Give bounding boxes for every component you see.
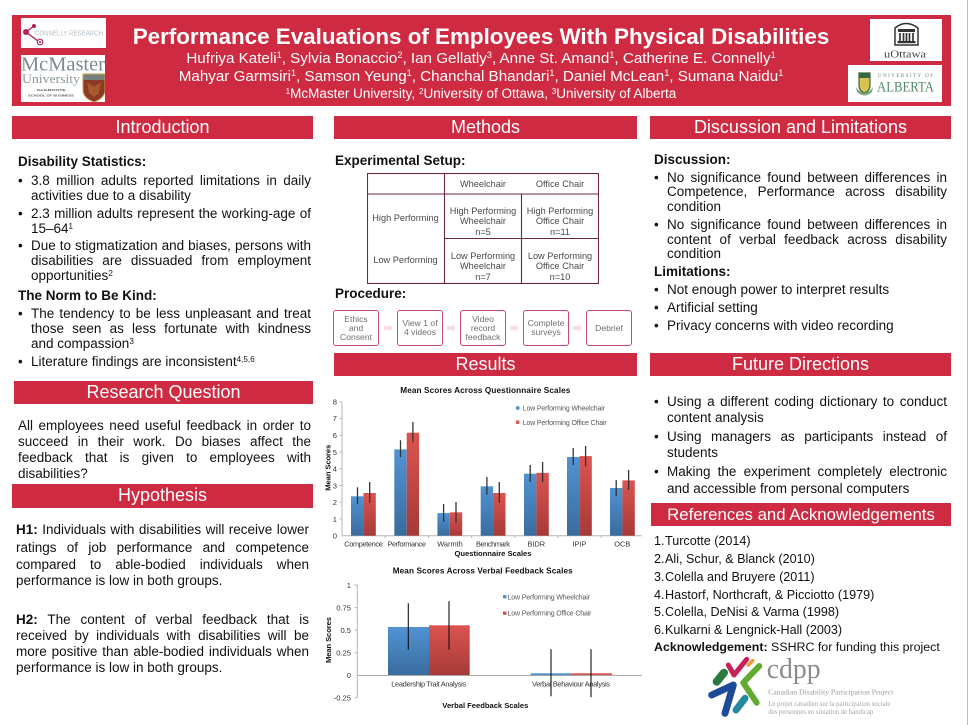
bar chart: questionnaire scales: 7 xyxy=(333,414,337,423)
panel: hypotheses text: H1: Individuals with disabilities will receive lower xyxy=(16,522,309,537)
panel: references list: 6. xyxy=(654,623,665,637)
heading: Results: Results xyxy=(455,354,516,374)
panel: references list: Hastorf, Northcraft, & Picciotto (1979) xyxy=(665,588,874,602)
bar chart: questionnaire scales: BIDR xyxy=(527,540,545,548)
bar chart: questionnaire scales: 0 xyxy=(333,532,337,540)
panel: future directions text: Using managers as participants instead of xyxy=(667,429,947,444)
title: Performance Evaluations of Employees With Physical Disabilities xyxy=(133,24,829,49)
table: experimental setup: Low Performing xyxy=(528,251,592,261)
bar chart: questionnaire scales: Mean Scores Across Questionnaire Scales xyxy=(400,386,571,395)
header banner xyxy=(12,15,951,106)
bar chart: verbal feedback scales: 0.75 xyxy=(336,604,351,612)
legend xyxy=(503,594,592,618)
panel: future directions text: • xyxy=(654,429,659,444)
panel: hypotheses text: compared to able-bodied individuals when xyxy=(16,557,309,572)
panel: introduction text: The Norm to Be Kind: xyxy=(18,288,157,303)
panel: introduction text: activities due to a disability xyxy=(31,188,191,203)
table: experimental setup: High Performing xyxy=(450,206,516,216)
panel: future directions text: Making the experiment completely electronic xyxy=(667,464,947,479)
logo: uOttawa xyxy=(870,19,942,61)
panel: discussion and limitations text xyxy=(654,152,947,333)
bar chart: verbal feedback scales: Verbal Behaviour Analysis xyxy=(532,680,610,688)
table: experimental setup: High Performing xyxy=(527,206,593,216)
heading: Introduction: Introduction xyxy=(115,117,210,137)
heading: Procedure: Procedure: xyxy=(335,286,406,301)
heading: Hypothesis: Hypothesis xyxy=(118,485,207,505)
panel: discussion and limitations text: Limitations: xyxy=(654,264,730,278)
bar chart: questionnaire scales: 2 xyxy=(333,498,337,507)
panel: introduction text: • xyxy=(18,354,23,369)
table: experimental setup: High Performing xyxy=(372,213,439,223)
table: experimental setup: n=5 xyxy=(475,227,491,237)
flow: procedure steps: Consent xyxy=(340,332,372,342)
panel: discussion and limitations text: • xyxy=(654,282,659,296)
panel: future directions text: • xyxy=(654,394,659,409)
bar chart: questionnaire scales: 6 xyxy=(333,431,337,440)
table: experimental setup: Wheelchair xyxy=(460,261,506,271)
panel: introduction text: • xyxy=(18,238,23,253)
panel: discussion and limitations text: condition xyxy=(667,246,721,260)
panel: future directions text xyxy=(654,394,948,496)
panel: introduction text: 3.8 million adults reported limitations in daily xyxy=(31,173,311,188)
bar chart: questionnaire scales: OCB xyxy=(614,540,630,548)
flow: procedure steps: feedback xyxy=(466,332,500,342)
panel: discussion and limitations text: Artificial setting xyxy=(667,300,758,314)
panel: discussion and limitations text: • xyxy=(654,216,659,232)
logo: Canadian Disability Participation Project: des personnes en situation de handicap xyxy=(768,709,874,716)
bar chart: questionnaire scales: Competence xyxy=(344,540,383,548)
panel: references list: 5. xyxy=(654,605,665,619)
bar chart: questionnaire scales: 1 xyxy=(333,515,337,524)
panel: discussion and limitations text: No significance found between differences in xyxy=(667,170,947,184)
legend: Low Performing Wheelchair xyxy=(523,406,606,412)
flow: procedure steps: record xyxy=(471,322,495,332)
panel: future directions text: • xyxy=(654,464,659,479)
panel: hypotheses text: performance is low in both groups. xyxy=(16,660,222,675)
bars xyxy=(388,625,612,675)
table: experimental setup: Low Performing xyxy=(451,251,515,261)
panel: introduction text: disabilities are dissuaded from employment xyxy=(31,253,311,268)
bar chart: verbal feedback scales xyxy=(325,567,642,710)
heading: Research Question xyxy=(14,381,313,404)
table: experimental setup xyxy=(367,173,599,284)
panel: hypotheses text: H2: The content of verbal feedback that is xyxy=(16,612,309,627)
panel: research question text: All employees need useful feedback in order to xyxy=(18,418,311,433)
bar chart: questionnaire scales: 4 xyxy=(333,464,337,474)
panel: introduction text: opportunities2 xyxy=(31,268,113,283)
bar chart: questionnaire scales: Warmth xyxy=(437,540,463,548)
legend xyxy=(516,406,607,427)
panel: references list: Colella, DeNisi & Varma (1998) xyxy=(665,605,839,619)
heading: Methods xyxy=(334,116,637,139)
flow: procedure steps: Video xyxy=(472,314,494,324)
panel: introduction text: • xyxy=(18,206,23,221)
logo: University of Alberta: UNIVERSITY OF xyxy=(878,74,933,79)
table: experimental setup: n=7 xyxy=(475,272,491,282)
table: experimental setup: n=11 xyxy=(550,227,570,237)
panel: references list: Colella and Bruyere (2011) xyxy=(665,570,815,584)
error bars xyxy=(408,601,591,697)
bar chart: questionnaire scales xyxy=(325,386,642,558)
panel: hypotheses text: more positive than able-bodied individuals when xyxy=(16,644,309,659)
bar chart: verbal feedback scales: 0 xyxy=(347,671,351,680)
logo: uOttawa: uOttawa xyxy=(884,50,926,60)
panel: future directions text: content analysis xyxy=(667,410,764,425)
table: experimental setup: Office Chair xyxy=(536,179,584,189)
logo: McMaster University: SCHOOL OF BUSINESS xyxy=(28,94,74,98)
panel: introduction text: those seen as less fortunate with kindness xyxy=(31,321,311,336)
panel: hypotheses text: received by individuals with disabilities will be xyxy=(16,628,309,643)
bar chart: verbal feedback scales: 0.5 xyxy=(340,626,351,635)
panel: introduction text: The tendency to be less unpleasant and treat xyxy=(31,306,311,321)
panel: research question text: disabilities? xyxy=(18,466,88,481)
panel: references list: Ali, Schur, & Blanck (2010) xyxy=(665,552,815,566)
bar chart: questionnaire scales: 5 xyxy=(333,448,337,457)
panel: introduction text: 2.3 million adults represent the working-age of xyxy=(31,206,311,221)
panel: references list: 2. xyxy=(654,552,665,566)
panel: discussion and limitations text: condition xyxy=(667,198,721,214)
panel: introduction text: • xyxy=(18,306,23,321)
heading: Hypothesis xyxy=(12,484,313,508)
authors and affiliations: Mahyar Garmsiri1, Samson Yeung1, Chanchal Bhandari1, Daniel McLean1, Sumana Naidu1 xyxy=(179,68,783,84)
panel: references list: 4. xyxy=(654,588,665,602)
panel: introduction text: and compassion3 xyxy=(31,336,134,351)
panel: hypotheses text: ratings of job performance and competence xyxy=(16,540,309,555)
legend: Low Performing Wheelchair xyxy=(508,594,591,601)
bar chart: verbal feedback scales: -0.25 xyxy=(334,694,351,702)
panel: discussion and limitations text: Discussion: xyxy=(654,152,731,166)
panel: introduction text xyxy=(18,154,312,369)
bar chart: questionnaire scales: Questionnaire Scales xyxy=(454,549,532,558)
panel: introduction text: • xyxy=(18,173,23,188)
heading: Future Directions xyxy=(650,353,951,376)
heading: Introduction xyxy=(12,116,313,139)
heading: Discussion and Limitations xyxy=(650,116,951,139)
bar chart: verbal feedback scales: 0.25 xyxy=(336,649,351,658)
panel: future directions text: and accessible from personal computers xyxy=(667,481,909,496)
flow: procedure steps: Complete xyxy=(528,318,564,328)
authors and affiliations: 1McMaster University, 2University of Ottawa, 3University of Alberta xyxy=(286,86,676,101)
heading: Results xyxy=(334,353,637,376)
flow: procedure steps: Ethics xyxy=(344,314,368,324)
panel: references list: Turcotte (2014) xyxy=(665,534,751,548)
panel: introduction text: Literature findings are inconsistent4,5,6 xyxy=(31,354,255,369)
logo: McMaster University: DeGROOTE xyxy=(37,88,66,92)
flow: procedure steps: 4 videos xyxy=(404,327,436,337)
table: experimental setup: Wheelchair xyxy=(460,216,506,226)
panel: references list: 1. xyxy=(654,534,665,548)
authors and affiliations xyxy=(179,50,783,101)
panel: discussion and limitations text: content of verbal feedback across disability xyxy=(667,232,947,246)
panel: references list: Acknowledgement: SSHRC for funding this project xyxy=(654,640,940,654)
panel: discussion and limitations text: Not enough power to interpret results xyxy=(667,282,889,296)
panel: hypotheses text: performance is low in both groups. xyxy=(16,573,222,588)
table: experimental setup: n=10 xyxy=(550,272,570,282)
red bars xyxy=(363,433,635,536)
table: experimental setup: Low Performing xyxy=(373,255,438,265)
logo: Canadian Disability Participation Project: Le projet canadien sur la participation sociale xyxy=(768,701,890,708)
flow: procedure steps: View 1 of xyxy=(402,318,438,328)
bar chart: verbal feedback scales: Verbal Feedback Scales xyxy=(442,701,528,710)
panel: references list: 3. xyxy=(654,570,665,584)
panel: hypotheses text xyxy=(16,522,309,675)
bar chart: questionnaire scales: IPIP xyxy=(572,540,586,548)
flow: procedure steps: Debrief xyxy=(595,322,623,332)
panel: discussion and limitations text: • xyxy=(654,170,659,184)
bar chart: questionnaire scales: Benchmark xyxy=(476,540,510,548)
blue bars xyxy=(351,449,622,536)
legend: Low Performing Office Chair xyxy=(523,420,607,427)
bar chart: verbal feedback scales: Mean Scores Across Verbal Feedback Scales xyxy=(393,567,573,576)
bar chart: verbal feedback scales: Leadership Trait Analysis xyxy=(391,680,466,688)
panel: introduction text: 15–641 xyxy=(31,221,73,236)
panel: future directions text: Using a different coding dictionary to conduct xyxy=(667,394,947,409)
bar chart: questionnaire scales: 8 xyxy=(333,398,337,406)
flow: procedure steps xyxy=(333,310,632,346)
heading: Research Question: Research Question xyxy=(86,382,241,402)
heading: Future Directions: Future Directions xyxy=(732,354,869,374)
logo: McMaster University xyxy=(21,55,105,102)
panel: discussion and limitations text: • xyxy=(654,300,659,314)
bar chart: questionnaire scales: 3 xyxy=(333,481,337,490)
table: experimental setup: Office Chair xyxy=(536,216,584,226)
panel: discussion and limitations text: Competence, Performance across disability xyxy=(667,184,947,198)
panel: research question text: feedback that is given to employees with xyxy=(18,450,311,465)
logo: Canadian Disability Participation Project xyxy=(708,655,894,717)
heading: Methods: Methods xyxy=(451,117,520,137)
logo: McMaster University: University xyxy=(22,71,81,86)
panel: research question text: succeed in their work. Do biases affect the xyxy=(18,434,311,449)
panel: discussion and limitations text: • xyxy=(654,318,659,332)
panel: future directions text: students xyxy=(667,445,718,460)
flow: procedure steps: surveys xyxy=(531,327,561,337)
panel: references list: Kulkarni & Lengnick-Hall (2003) xyxy=(665,623,842,637)
logo: Canadian Disability Participation Project: Canadian Disability Participation Project xyxy=(768,687,894,696)
heading: Discussion and Limitations: Discussion and Limitations xyxy=(694,117,907,137)
panel: introduction text: Disability Statistics: xyxy=(18,154,146,169)
logo: Connelly Research xyxy=(21,18,106,48)
legend: Low Performing Office Chair xyxy=(508,611,592,618)
logo: University of Alberta xyxy=(848,65,942,102)
bar chart: verbal feedback scales: 1 xyxy=(347,581,351,590)
table: experimental setup: Office Chair xyxy=(536,261,584,271)
table: experimental setup: Wheelchair xyxy=(460,179,506,189)
flow: procedure steps: and xyxy=(349,322,363,332)
panel: references list xyxy=(654,534,940,654)
panel: discussion and limitations text: Privacy concerns with video recording xyxy=(667,318,894,332)
panel: discussion and limitations text: No significance found between differences in xyxy=(667,216,947,232)
panel: research question text xyxy=(18,418,311,481)
heading: References and Acknowledgements: References and Acknowledgements xyxy=(667,505,935,524)
bar chart: questionnaire scales: Performance xyxy=(387,540,426,548)
heading: Experimental Setup: Experimental Setup: xyxy=(335,153,466,168)
error bars xyxy=(358,422,629,523)
authors and affiliations: Hufriya Kateli1, Sylvia Bonaccio2, Ian Gellatly3, Anne St. Amand1, Catherine E. Connelly1 xyxy=(186,50,776,66)
panel: introduction text: Due to stigmatization and biases, persons with xyxy=(31,238,311,253)
